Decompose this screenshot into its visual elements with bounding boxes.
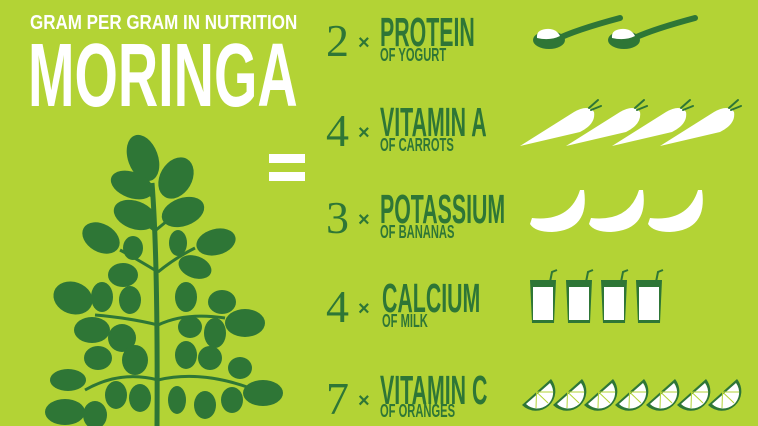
row: protein [326,9,475,66]
row: calcium: CALCIUM [382,275,480,321]
row: potassium: × [358,209,370,231]
row: potassium [326,186,505,243]
row: protein: 2 [326,15,349,66]
row: protein: PROTEIN [380,9,475,55]
row: calcium: 4 [326,281,349,332]
row: vitamin A: OF CARROTS [380,135,454,155]
row: potassium: OF BANANAS [380,222,454,242]
row: potassium: 3 [326,192,349,243]
row: vitamin C [326,367,487,424]
row: vitamin A: 4 [326,105,349,156]
row: potassium: POTASSIUM [380,186,505,232]
row: vitamin C: OF ORANGES [380,401,455,421]
equals sign [269,154,305,181]
row: vitamin C: × [358,390,370,412]
row: vitamin A [326,99,487,156]
row: protein: OF YOGURT [380,45,446,65]
row: calcium: OF MILK [382,311,428,331]
row: vitamin A: × [358,122,370,144]
row: calcium: × [358,298,370,320]
row: calcium [326,275,480,332]
subtitle: GRAM PER GRAM IN NUTRITION [30,12,297,34]
title: MORINGA [28,26,298,126]
row: vitamin C: 7 [326,373,349,424]
row: protein: × [358,32,370,54]
row: vitamin A: VITAMIN A [380,99,487,145]
row: vitamin C: VITAMIN C [380,367,487,413]
